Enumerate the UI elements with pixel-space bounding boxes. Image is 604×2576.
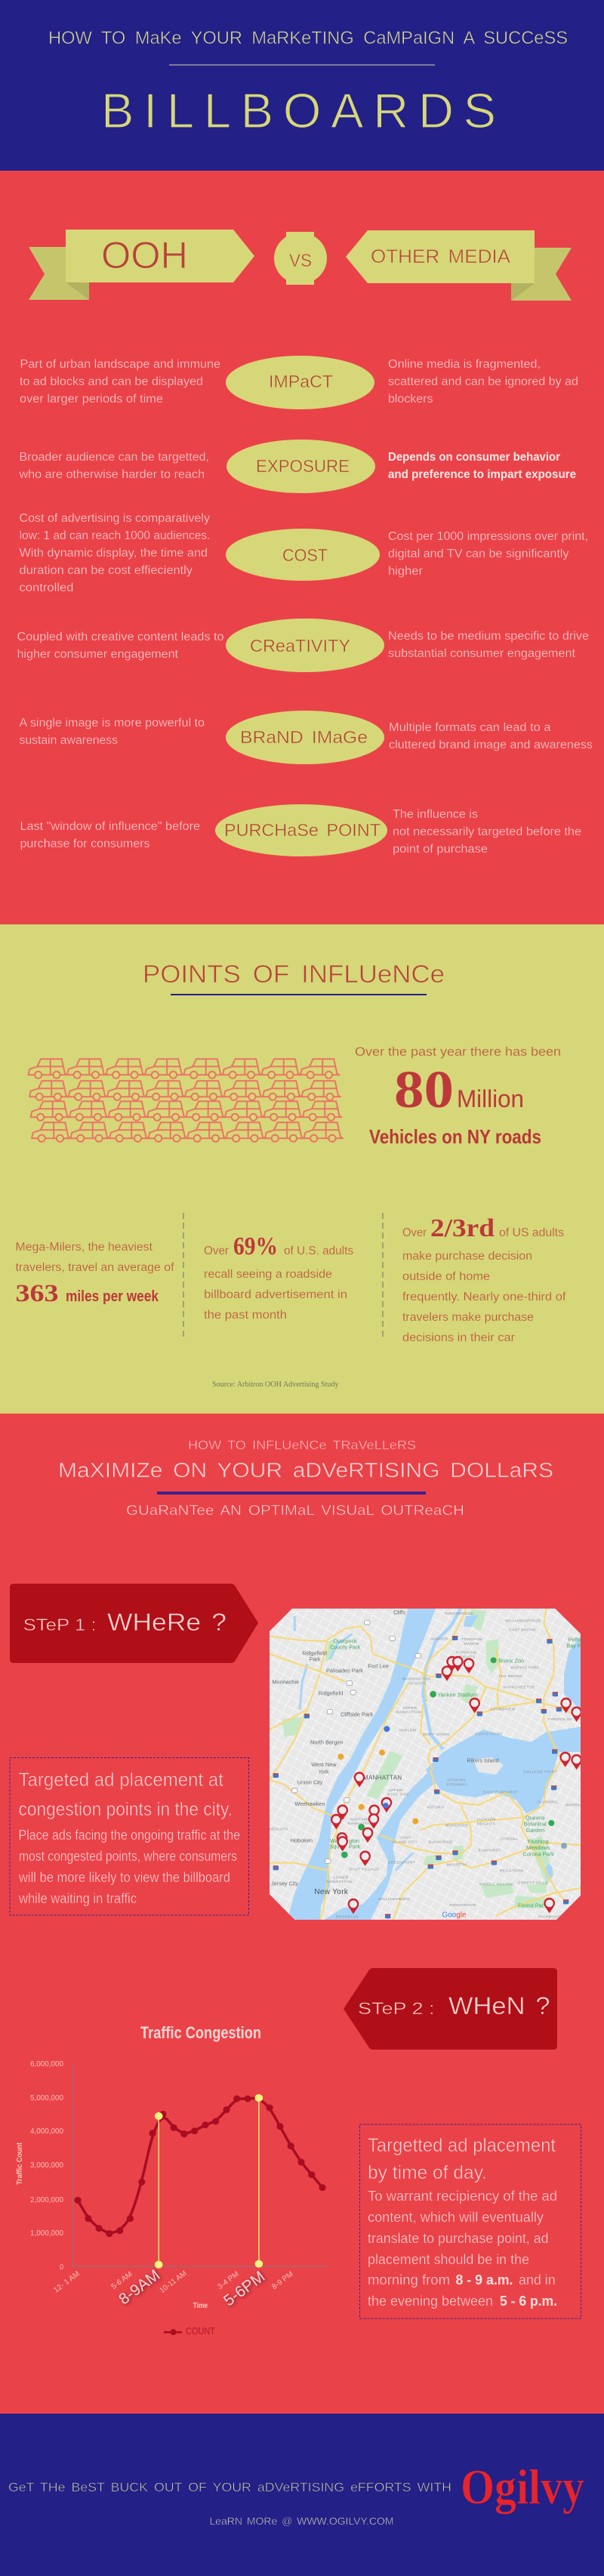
row: purchase point: The influence is — [393, 808, 478, 821]
map: new york congestion points: Park — [309, 1655, 321, 1662]
map: new york congestion points: RICHMOND — [538, 1914, 561, 1919]
row: cost: low: 1 ad can reach 1000 audiences. — [20, 529, 210, 542]
stat: two thirds: make purchase decision — [402, 1250, 532, 1263]
text box: when: by time of day. — [368, 2162, 487, 2183]
map: new york congestion points: MANOR — [464, 1642, 479, 1646]
row: impact: Online media is fragmented, — [388, 358, 541, 371]
map: new york congestion points: Moonachie — [272, 1678, 299, 1685]
map: new york congestion points: DITMARS — [447, 1779, 466, 1783]
stat: 69 percent: the past month — [204, 1309, 287, 1322]
y axis labels: 1,000,000 — [30, 2229, 63, 2238]
map: new york congestion points: WASHINGTON — [402, 1677, 430, 1682]
map: new york congestion points — [270, 1609, 583, 1920]
y axis labels: 2,000,000 — [30, 2196, 63, 2204]
stat: 69 percent: 69% — [233, 1232, 278, 1260]
row: purchase point: PURCHaSe POINT — [224, 820, 381, 840]
source note: Source: Arbitron OOH Advertising Study — [212, 1381, 338, 1389]
stat: mega-milers: Mega-Milers, the heaviest — [15, 1241, 153, 1254]
stat: mega-milers: miles per week — [66, 1288, 159, 1305]
subtitle: HOW TO MaKe YOUR MaRKeTING CaMPaIGN A SUCCeSS — [48, 28, 568, 48]
row: exposure: Broader audience can be targetted, — [20, 451, 209, 464]
row: impact: scattered and can be ignored by ad — [388, 375, 578, 388]
map: new york congestion points: Meadows — [526, 1844, 550, 1851]
row: purchase point — [20, 804, 581, 856]
map: new york congestion points: MANHATTAN — [363, 1775, 402, 1782]
map: new york congestion points: Ridgefield — [319, 1689, 343, 1696]
map: new york congestion points: Fort Lee — [368, 1662, 389, 1669]
y axis labels: 3,000,000 — [30, 2161, 63, 2170]
y axis labels: 4,000,000 — [30, 2127, 63, 2136]
stat: 69 percent — [204, 1232, 353, 1322]
map: new york congestion points: EAST VILLAGE — [350, 1868, 379, 1872]
stat: two thirds: travelers make purchase — [402, 1311, 534, 1324]
map: new york congestion points: ELMHURST — [479, 1848, 501, 1853]
row: purchase point: purchase for consumers — [20, 838, 150, 850]
map: new york congestion points: THROGS NE — [547, 1717, 572, 1722]
row: cost: With dynamic display, the time and — [20, 547, 208, 560]
map: new york congestion points: THE BRONX — [498, 1674, 523, 1679]
text box: when: and in — [519, 2272, 556, 2288]
map: new york congestion points: PARKCHESTER — [504, 1685, 535, 1689]
text box: when: the evening between — [368, 2294, 493, 2309]
map: new york congestion points: UPPER — [388, 1788, 402, 1793]
map: new york congestion points: HEIGHTS — [477, 1822, 495, 1826]
row: creativity — [17, 619, 589, 672]
map: new york congestion points: York — [318, 1768, 329, 1775]
map: new york congestion points: KINGSBRIDGE — [445, 1612, 474, 1616]
map: new york congestion points: REGO PARK — [500, 1868, 524, 1873]
chart: traffic congestion — [16, 2023, 328, 2337]
footer — [8, 2460, 584, 2527]
row: exposure: and preference to impart exposure — [388, 468, 576, 481]
map: new york congestion points: COLLEGE POINT — [524, 1769, 557, 1774]
row: exposure: who are otherwise harder to reach — [18, 468, 205, 481]
stat: two thirds: frequently. Nearly one-third of — [402, 1291, 566, 1303]
text box: when: To warrant recipiency of the ad — [368, 2189, 557, 2204]
map: new york congestion points: ISLAND CITY — [392, 1840, 418, 1844]
y axis labels: 0 — [60, 2263, 63, 2272]
row: brand image: sustain awareness — [20, 734, 118, 747]
row: purchase point: Last "window of influence" before — [20, 820, 200, 833]
stat: 69 percent: recall seeing a roadside — [204, 1268, 332, 1281]
heading: maximize: HOW TO INFLUeNCe TRaVeLLeRS — [188, 1438, 416, 1452]
ribbon: OOH — [29, 230, 254, 300]
text box: where: most congested points, where consumers — [19, 1849, 237, 1864]
row: purchase point: point of purchase — [393, 843, 488, 856]
text box: when: Targetted ad placement — [368, 2135, 556, 2156]
stat: two thirds: of US adults — [499, 1226, 564, 1239]
map: new york congestion points: Ridgefield — [302, 1650, 327, 1657]
badge: step 1: STeP 1 : — [23, 1615, 97, 1634]
text box: when: placement should be in the — [368, 2252, 529, 2267]
text box: where: congestion points in the city. — [18, 1799, 233, 1820]
map: new york congestion points: LOWER — [334, 1875, 349, 1880]
map: new york congestion points: EAST BRONX — [509, 1628, 536, 1633]
map: new york congestion points: CORONA — [500, 1837, 519, 1841]
map: new york congestion points: MORRIS PARK — [510, 1665, 540, 1670]
text box: where: will be more likely to view the billboard — [18, 1870, 230, 1885]
legend: COUNT — [186, 2325, 215, 2337]
map: new york congestion points: FORDHAM — [456, 1651, 476, 1655]
map: new york congestion points: MIDTOWN — [350, 1818, 371, 1822]
stat: 80 million vehicles — [355, 1044, 561, 1148]
stat: two thirds: outside of home — [402, 1270, 490, 1283]
text box: when — [359, 2124, 581, 2318]
vs badge: VS — [289, 251, 312, 271]
map: new york congestion points: FLUSHING — [537, 1800, 558, 1805]
legend — [164, 2325, 215, 2337]
map: new york congestion points: Squ — [329, 1843, 339, 1850]
row: exposure — [18, 440, 576, 493]
text box: when: morning from — [368, 2272, 450, 2288]
map: new york congestion points: North Bergen — [310, 1739, 344, 1746]
row: impact: over larger periods of time — [20, 393, 163, 406]
map: new york congestion points: Jersey City — [271, 1880, 299, 1887]
map: new york congestion points: EAST ELMHURST — [483, 1791, 518, 1795]
map: new york congestion points: Hoboken — [291, 1837, 313, 1844]
stat: 69 percent: Over — [204, 1245, 229, 1257]
heading: maximize: MaXIMIZe ON YOUR aDVeRTISING DOLLaRS — [58, 1458, 553, 1482]
map: new york congestion points: Wa — [330, 1837, 339, 1844]
map: new york congestion points: WILLIAMSBRIDGE — [505, 1619, 541, 1624]
row: impact — [20, 356, 578, 409]
map: new york congestion points: MANHATTAN — [396, 1711, 421, 1715]
map: new york congestion points: Garden — [526, 1827, 544, 1834]
row: creativity: substantial consumer engagement — [388, 647, 576, 660]
heading: maximize: GUaRaNTee AN OPTIMaL VISUaL OUTReaCH — [126, 1503, 464, 1518]
map: new york congestion points: Flushing — [528, 1838, 549, 1845]
map: new york congestion points: Botanical — [524, 1821, 547, 1828]
row: impact: IMPaCT — [269, 372, 333, 391]
map: new york congestion points: Forest Par — [518, 1902, 544, 1909]
x axis labels: 5-6PM — [220, 2268, 268, 2310]
map: new york congestion points: UPPER — [403, 1706, 418, 1711]
highlight lines — [155, 2094, 263, 2269]
map: new york congestion points: Corona Park — [523, 1850, 554, 1857]
badge: step 2 — [344, 1968, 557, 2050]
row: impact: Part of urban landscape and immune — [20, 358, 220, 371]
x axis labels: 5-6 AM — [110, 2270, 134, 2291]
map: new york congestion points: GREENPOINT — [388, 1861, 415, 1865]
map: new york congestion points: MANHATTAN — [327, 1880, 352, 1884]
row: exposure: Depends on consumer behavior — [388, 451, 560, 464]
logo: ogilvy: Ogilvy — [461, 2460, 584, 2515]
row: purchase point: not necessarily targeted before the — [393, 825, 581, 838]
map: new york congestion points: INWOOD — [430, 1637, 448, 1641]
title: BILLBOARDS — [101, 83, 496, 138]
row: exposure: EXPOSURE — [256, 456, 350, 476]
row: cost: controlled — [20, 582, 74, 594]
row: brand image: Multiple formats can lead to a — [389, 721, 551, 734]
map: new york congestion points: HUNTS POINT — [475, 1732, 503, 1736]
y axis labels — [16, 2060, 63, 2272]
map: new york congestion points: ASTORIA — [427, 1806, 445, 1810]
row: cost: COST — [282, 545, 328, 565]
row: creativity: Coupled with creative content leads to — [17, 631, 223, 643]
map: new york congestion points: LONG — [399, 1835, 411, 1840]
row: cost: Cost of advertising is comparatively — [20, 512, 210, 525]
stat: two thirds: decisions in their car — [402, 1331, 515, 1344]
ribbon: other media: OTHER MEDIA — [371, 246, 510, 267]
badge: step 2: WHeN ? — [448, 1992, 550, 2019]
text box: when: translate to purchase point, ad — [368, 2231, 548, 2246]
badge: step 1: WHeRe ? — [107, 1609, 226, 1636]
x axis labels: Time — [193, 2301, 208, 2310]
stat: 80 million vehicles: Million — [457, 1085, 524, 1112]
map: new york congestion points: HEIGHTS — [408, 1681, 426, 1686]
row: creativity: Needs to be medium specific to drive — [388, 630, 589, 643]
x axis labels: 8-9 PM — [270, 2270, 295, 2291]
y axis labels: Traffic Count — [16, 2142, 24, 2185]
map: new york congestion points: SUNNYSIDE — [429, 1840, 453, 1844]
map: new york congestion points: Weehawken — [294, 1800, 325, 1807]
vs badge — [274, 232, 327, 285]
text box: when: 8 - 9 a.m. — [456, 2272, 513, 2288]
map: new york congestion points: JACKSON — [476, 1818, 496, 1822]
map: new york congestion points: MANHATTAN — [347, 1822, 373, 1826]
badge: step 1 — [10, 1584, 258, 1663]
map: new york congestion points: Rikers Island — [467, 1757, 499, 1764]
header — [48, 28, 568, 138]
map: new york congestion points: HEIGHTS — [270, 1827, 288, 1831]
stat: 69 percent: billboard advertisement in — [204, 1288, 347, 1301]
map: new york congestion points: gton — [349, 1837, 359, 1844]
stat: mega-milers — [15, 1241, 174, 1307]
map: new york congestion points: RIDGEWOOD — [450, 1903, 476, 1908]
stat: mega-milers: 363 — [15, 1280, 59, 1307]
map: new york congestion points: BROOKLYN — [336, 1915, 359, 1920]
map: new york congestion points: WOODSIDE — [445, 1824, 468, 1828]
stat: 80 million vehicles: Over the past year there has been — [355, 1044, 561, 1059]
map: new york congestion points: Park — [349, 1843, 360, 1850]
row: brand image — [20, 711, 593, 764]
map: new york congestion points: Union City — [297, 1779, 323, 1786]
chart title: Traffic Congestion — [140, 2023, 261, 2042]
map: new york congestion points: STEINWAY — [446, 1783, 467, 1788]
text box: where — [10, 1758, 249, 1915]
row: impact: blockers — [388, 393, 433, 406]
map: new york congestion points: Cliffside Park — [341, 1711, 373, 1717]
y axis labels: 5,000,000 — [30, 2094, 63, 2102]
ribbon: OOH: OOH — [101, 234, 188, 276]
map: new york congestion points: Cliffs — [393, 1609, 405, 1615]
text box: where: Targeted ad placement at — [18, 1769, 223, 1791]
row: creativity: higher consumer engagement — [17, 648, 179, 661]
x axis labels: 3-4 PM — [216, 2270, 241, 2291]
x axis labels: 12- 1 AM — [52, 2270, 82, 2294]
icon grid: cars — [29, 1059, 343, 1142]
map: new york congestion points: West New — [311, 1761, 337, 1768]
y axis labels: 6,000,000 — [30, 2060, 63, 2069]
row: cost: higher — [388, 565, 423, 578]
text box: where: Place ads facing the ongoing traffic at the — [18, 1828, 240, 1843]
stat: two thirds — [402, 1214, 566, 1344]
text box: when: content, which will eventually — [368, 2210, 544, 2225]
text box: where: while waiting in traffic — [18, 1891, 137, 1906]
map: new york congestion points: MASPETH — [447, 1862, 467, 1867]
row: cost: digital and TV can be significantly — [388, 548, 569, 560]
heading: points of influence: POINTS OF INFLUeNCe — [143, 960, 445, 988]
map: new york congestion points: Bronx Zoo — [498, 1658, 524, 1664]
map: new york congestion points: MURRA — [565, 1803, 581, 1808]
map: new york congestion points: MIDDLE VILLAGE — [479, 1882, 514, 1886]
stat: 69 percent: of U.S. adults — [284, 1245, 353, 1257]
map: new york congestion points: Yankee Stadium — [437, 1692, 478, 1698]
map: new york congestion points: Google — [442, 1911, 467, 1919]
row: creativity: CReaTIVITY — [250, 636, 350, 656]
map: new york congestion points: Queens — [525, 1815, 545, 1822]
footer tagline: GeT THe BeST BUCK OUT OF YOUR aDVeRTISING eFFORTS WITH — [8, 2480, 451, 2494]
ribbon: other media — [346, 230, 572, 301]
map: new york congestion points: FORDHAM — [461, 1637, 482, 1642]
map: new york congestion points: Overpeck — [333, 1638, 357, 1645]
x axis labels — [52, 2266, 295, 2310]
map: new york congestion points: Bay P — [566, 1642, 581, 1649]
map: new york congestion points: MOTT HAVEN — [423, 1732, 450, 1737]
map: new york congestion points: New York — [314, 1888, 348, 1896]
row: brand image: BRaND IMaGe — [240, 727, 368, 747]
footer link: LeaRN MORe @ WWW.OGILVY.COM — [210, 2515, 394, 2527]
x axis labels: 10-11 AM — [158, 2269, 189, 2295]
map: new york congestion points: HARLEM — [399, 1729, 416, 1733]
stat: mega-milers: travelers, travel an average of — [15, 1261, 174, 1274]
map: new york congestion points: Palisades Park — [326, 1667, 363, 1674]
row: brand image: A single image is more powerful to — [20, 717, 205, 730]
map: new york congestion points: County Park — [330, 1644, 361, 1651]
row: cost — [20, 512, 588, 594]
x axis labels: 8-9AM — [116, 2266, 163, 2309]
map: new york congestion points: SOUNDVIEW — [490, 1707, 516, 1711]
map: new york congestion points: EAST SIDE — [387, 1793, 410, 1797]
map: new york congestion points: Pelha — [569, 1636, 583, 1643]
stat: 80 million vehicles: Vehicles on NY roads — [369, 1125, 541, 1148]
map: new york congestion points: HEIGHTS — [457, 1655, 476, 1660]
map: new york congestion points: FOREST HILLS — [518, 1881, 548, 1886]
map: new york congestion points: WILLIAMSBURG — [378, 1897, 410, 1902]
stat: two thirds: Over — [402, 1226, 427, 1239]
heading: maximize — [58, 1438, 553, 1518]
badge: step 2: STeP 2 : — [358, 1999, 435, 2018]
row: impact: to ad blocks and can be displayed — [20, 375, 203, 388]
row: cost: duration can be cost effieciently — [20, 564, 193, 577]
data line and markers — [74, 2095, 326, 2237]
row: cost: Cost per 1000 impressions over print, — [388, 530, 588, 543]
row: brand image: cluttered brand image and awareness — [389, 739, 593, 751]
stat: two thirds: 2/3rd — [430, 1214, 495, 1242]
text box: when: 5 - 6 p.m. — [500, 2294, 557, 2309]
stat: 80 million vehicles: 80 — [394, 1061, 454, 1119]
